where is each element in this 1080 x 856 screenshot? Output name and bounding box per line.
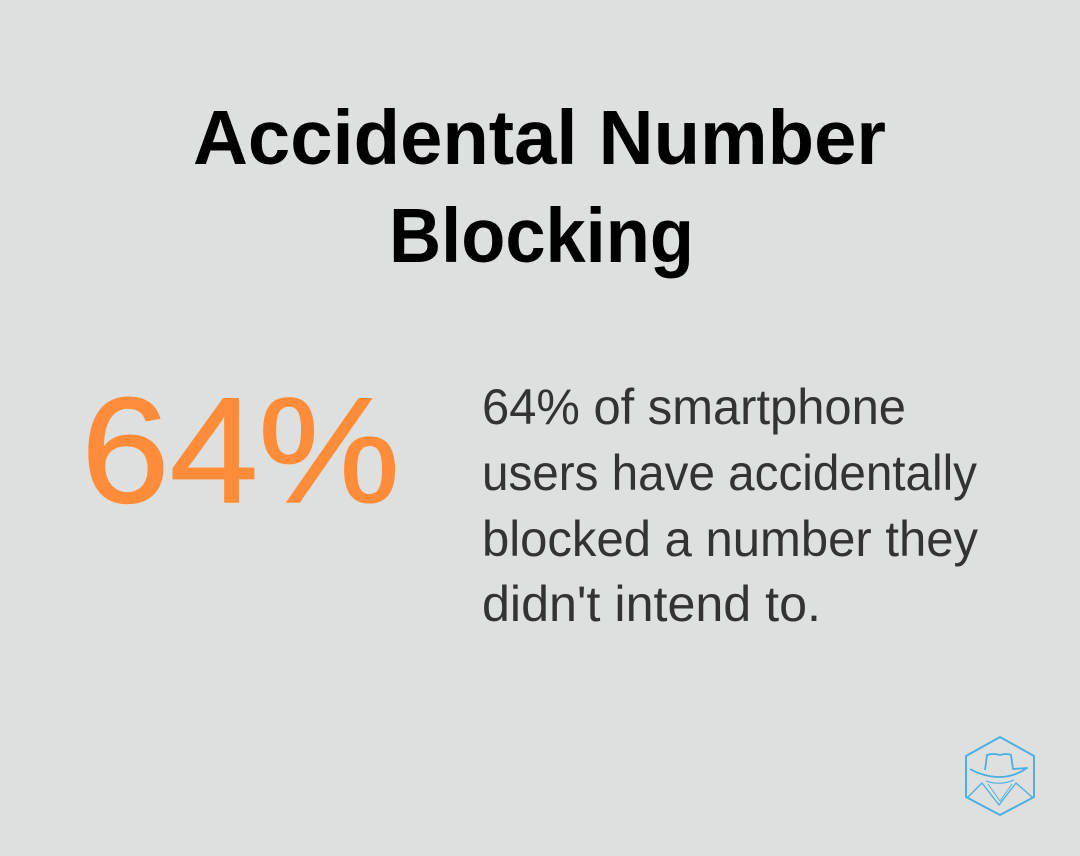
description text — [482, 379, 978, 632]
title — [193, 95, 886, 279]
icon: hexagon logo with hat — [966, 737, 1034, 815]
description text: 64% of smartphone — [482, 379, 906, 435]
description text: blocked a number they — [482, 511, 978, 567]
big statistic: 64% — [81, 366, 400, 534]
description text: users have accidentally — [482, 445, 977, 501]
description text: didn't intend to. — [482, 576, 821, 632]
title: Blocking — [389, 193, 694, 279]
title: Accidental Number — [193, 95, 886, 181]
